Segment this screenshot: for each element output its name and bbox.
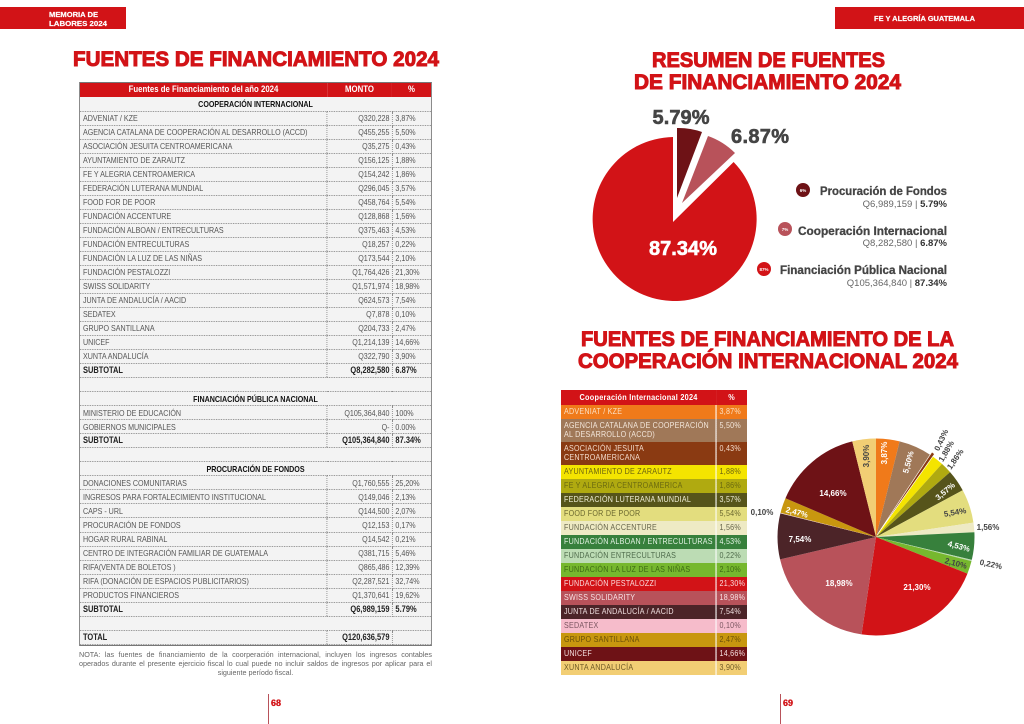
summary legend: cooperacion internacional: 7% <box>782 227 788 232</box>
table: funding sources 2024: PRODUCTOS FINANCIEROS <box>83 590 179 600</box>
table: funding sources 2024: FUNDACIÓN PESTALOZZI <box>83 267 170 277</box>
page number 69 <box>780 694 793 724</box>
table: funding sources 2024: Q154,242 <box>358 169 389 179</box>
table: international cooperation legend: AGENCIA CATALANA DE COOPERACIÓN <box>564 420 709 430</box>
table: funding sources 2024: 25,20% <box>395 478 420 488</box>
summary legend: procuracion de fondos: 6% <box>800 188 806 193</box>
table: funding sources 2024: HOGAR RURAL RABINAL <box>83 534 167 544</box>
table: funding sources 2024: Q144,500 <box>358 506 389 516</box>
table: international cooperation legend: AYUNTAMIENTO DE ZARAUTZ <box>564 466 672 476</box>
table: funding sources 2024: Q1,760,555 <box>352 478 389 488</box>
table: funding sources 2024: 1,86% <box>395 169 416 179</box>
table: funding sources 2024: Q128,868 <box>358 211 389 221</box>
table: funding sources 2024: 87.34% <box>395 435 421 445</box>
table: international cooperation legend: 21,30% <box>720 578 745 588</box>
table: funding sources 2024: Fuentes de Financiamiento del año 2024 <box>129 84 278 94</box>
table: international cooperation legend: 3,57% <box>720 494 741 504</box>
table: international cooperation legend <box>561 390 747 675</box>
table: international cooperation legend: CENTROAMERICANA <box>564 452 640 462</box>
table: funding sources 2024: Q12,153 <box>362 520 389 530</box>
table: funding sources 2024: FINANCIACIÓN PÚBLICA NACIONAL <box>193 394 318 404</box>
table: funding sources 2024: Q120,636,579 <box>342 632 389 642</box>
summary legend: financiacion publica nacional <box>757 262 948 289</box>
table: funding sources 2024: Q156,125 <box>358 155 389 165</box>
summary pie chart: 6.87% <box>731 126 789 148</box>
table: funding sources 2024: PROCURACIÓN DE FONDOS <box>206 464 305 474</box>
table: funding sources 2024: RIFA(VENTA DE BOLETOS ) <box>83 562 176 572</box>
cooperation pie chart: 18,98% <box>825 579 853 588</box>
summary legend: financiacion publica nacional: Q105,364,840 | 87.34% <box>847 278 948 289</box>
table: funding sources 2024 <box>80 83 431 645</box>
title: fuentes de financiamiento: FUENTES DE FINANCIAMIENTO 2024 <box>73 48 439 71</box>
table: funding sources 2024: 4,53% <box>395 225 416 235</box>
table: international cooperation legend: SEDATEX <box>564 620 598 630</box>
table: funding sources 2024: RIFA (DONACIÓN DE ESPACIOS PUBLICITARIOS) <box>83 576 249 586</box>
page number 68: 68 <box>271 698 281 708</box>
table: international cooperation legend: 18,98% <box>720 592 745 602</box>
table: funding sources 2024: FUNDACIÓN ALBOAN / ENTRECULTURAS <box>83 225 224 235</box>
table: international cooperation legend: 14,66% <box>720 648 745 658</box>
table: funding sources 2024: TOTAL <box>83 632 107 642</box>
table: funding sources 2024: 5.79% <box>395 604 417 614</box>
table: funding sources 2024: MONTO <box>345 84 374 94</box>
table: funding sources 2024: Q375,463 <box>358 225 389 235</box>
table: international cooperation legend: 3,87% <box>720 406 741 416</box>
table: funding sources 2024: 2,47% <box>395 323 416 333</box>
table: funding sources 2024: SUBTOTAL <box>83 365 123 375</box>
cooperation pie chart: 3,90% <box>862 445 871 467</box>
table: international cooperation legend: 7,54% <box>720 606 741 616</box>
title: resumen de fuentes: RESUMEN DE FUENTES <box>652 49 885 72</box>
table: funding sources 2024: 0,22% <box>395 239 416 249</box>
table: funding sources 2024: 5,54% <box>395 197 416 207</box>
cooperation pie chart: 1,56% <box>977 523 999 532</box>
table: international cooperation legend: AL DESARROLLO (ACCD) <box>564 429 655 439</box>
table: funding sources 2024: Q320,228 <box>358 113 389 123</box>
summary legend: procuracion de fondos <box>796 183 948 210</box>
table: funding sources 2024: AYUNTAMIENTO DE ZARAUTZ <box>83 155 185 165</box>
table: international cooperation legend: 1,86% <box>720 480 741 490</box>
table: funding sources 2024: Q8,282,580 <box>350 365 389 375</box>
table: international cooperation legend: SWISS SOLIDARITY <box>564 592 635 602</box>
summary legend: financiacion publica nacional: Financiación Pública Nacional <box>780 263 947 277</box>
table: international cooperation legend: ASOCIACIÓN JESUITA <box>564 443 644 453</box>
table: funding sources 2024: CAPS - URL <box>83 506 123 516</box>
table: funding sources 2024: 21,30% <box>395 267 420 277</box>
footnote: operados durante el presente ejercicio fiscal lo cual puede no incluir saldos de ingresos por aplicar para el <box>79 659 432 668</box>
table: funding sources 2024: 100% <box>395 408 414 418</box>
table: funding sources 2024: 0,10% <box>395 309 416 319</box>
table: funding sources 2024: JUNTA DE ANDALUCÍA / AACID <box>83 295 186 305</box>
table: funding sources 2024: 0,21% <box>395 534 416 544</box>
table: international cooperation legend: 5,54% <box>720 508 741 518</box>
table: funding sources 2024: FE Y ALEGRIA CENTROAMERICA <box>83 169 195 179</box>
table: funding sources 2024: INGRESOS PARA FORTALECIMIENTO INSTITUCIONAL <box>83 492 266 502</box>
footnote: siguiente período fiscal. <box>218 668 293 677</box>
header tab right <box>835 7 1024 29</box>
table: funding sources 2024: FUNDACIÓN LA LUZ DE LAS NIÑAS <box>83 253 202 263</box>
table: funding sources 2024: Q149,046 <box>358 492 389 502</box>
summary legend: financiacion publica nacional: 87% <box>759 267 769 272</box>
table: international cooperation legend: XUNTA ANDALUCÍA <box>564 662 633 672</box>
table: funding sources 2024: 32,74% <box>395 576 420 586</box>
summary legend: cooperacion internacional: Cooperación Internacional <box>798 224 947 238</box>
table: funding sources 2024: Q204,733 <box>358 323 389 333</box>
table: funding sources 2024: SEDATEX <box>83 309 116 319</box>
cooperation pie chart: 4,53% <box>947 539 971 554</box>
table: funding sources 2024: 3,87% <box>395 113 416 123</box>
table: funding sources 2024: SUBTOTAL <box>83 604 123 614</box>
table: international cooperation legend: 4,53% <box>720 536 741 546</box>
table: international cooperation legend: JUNTA DE ANDALUCÍA / AACID <box>564 606 674 616</box>
table: international cooperation legend: 2,47% <box>720 634 741 644</box>
cooperation pie chart: 1,86% <box>945 447 966 471</box>
header tab left <box>0 7 126 29</box>
summary legend: procuracion de fondos: Q6,989,159 | 5.79% <box>863 199 948 210</box>
table: funding sources 2024: Q458,764 <box>358 197 389 207</box>
table: funding sources 2024: 0,43% <box>395 141 416 151</box>
table: funding sources 2024: Q296,045 <box>358 183 389 193</box>
footnote: NOTA: las fuentes de financiamiento de la coorperación internacional, incluyen los ingresos contables <box>79 650 432 659</box>
table: funding sources 2024: Q6,989,159 <box>350 604 389 614</box>
table: funding sources 2024: XUNTA ANDALUCÍA <box>83 351 149 361</box>
table: funding sources 2024: Q35,275 <box>362 141 389 151</box>
summary pie chart <box>593 107 789 301</box>
cooperation pie chart: 14,66% <box>819 489 847 498</box>
table: funding sources 2024: Q624,573 <box>358 295 389 305</box>
table: funding sources 2024: 1,88% <box>395 155 416 165</box>
table: international cooperation legend: Cooperación Internacional 2024 <box>580 392 698 402</box>
table: funding sources 2024: Q322,790 <box>358 351 389 361</box>
table: funding sources 2024: 2,07% <box>395 506 416 516</box>
table: funding sources 2024: CENTRO DE INTEGRACIÓN FAMILIAR DE GUATEMALA <box>83 548 268 558</box>
table: funding sources 2024: 19,62% <box>395 590 420 600</box>
table: funding sources 2024: Q1,370,641 <box>352 590 389 600</box>
cooperation pie chart <box>751 428 1003 592</box>
cooperation pie chart: 3,87% <box>880 442 889 464</box>
table: funding sources 2024: SWISS SOLIDARITY <box>83 281 150 291</box>
table: funding sources 2024: 18,98% <box>395 281 420 291</box>
table: funding sources 2024: Q2,287,521 <box>352 576 389 586</box>
title: cooperacion internacional: COOPERACIÓN INTERNACIONAL 2024 <box>578 349 958 373</box>
table: funding sources 2024: 6.87% <box>395 365 417 375</box>
table: funding sources 2024: 7,54% <box>395 295 416 305</box>
table: funding sources 2024: AGENCIA CATALANA DE COOPERACIÓN AL DESARROLLO (ACCD) <box>83 127 308 137</box>
footnote <box>79 650 432 677</box>
table: funding sources 2024: GOBIERNOS MUNICIPALES <box>83 422 176 432</box>
table: international cooperation legend: 2,10% <box>720 564 741 574</box>
cooperation pie chart: 0,43% <box>933 428 950 452</box>
table: funding sources 2024: 14,66% <box>395 337 420 347</box>
title: cooperacion internacional <box>578 328 958 373</box>
table: funding sources 2024: Q865,486 <box>358 562 389 572</box>
table: funding sources 2024: Q1,214,139 <box>352 337 389 347</box>
table: funding sources 2024: FUNDACIÓN ENTRECULTURAS <box>83 239 189 249</box>
summary pie chart: 5.79% <box>652 107 710 129</box>
table: international cooperation legend: FUNDACIÓN ENTRECULTURAS <box>564 550 676 560</box>
table: funding sources 2024: 12,39% <box>395 562 420 572</box>
title: resumen de fuentes: DE FINANCIAMIENTO 2024 <box>634 71 901 94</box>
table: funding sources 2024: ADVENIAT / KZE <box>83 113 138 123</box>
title: resumen de fuentes <box>634 49 901 94</box>
table: funding sources 2024: Q105,364,840 <box>342 435 389 445</box>
table: international cooperation legend: 5,50% <box>720 420 741 430</box>
table: funding sources 2024: GRUPO SANTILLANA <box>83 323 155 333</box>
cooperation pie chart: 2,10% <box>944 556 968 571</box>
table: funding sources 2024: 5,50% <box>395 127 416 137</box>
table: funding sources 2024: FEDERACIÓN LUTERANA MUNDIAL <box>83 183 203 193</box>
table: funding sources 2024: 5,46% <box>395 548 416 558</box>
cooperation pie chart: 0,22% <box>979 558 1003 571</box>
table: funding sources 2024: 2,10% <box>395 253 416 263</box>
table: funding sources 2024: Q- <box>382 422 389 432</box>
table: funding sources 2024: 2,13% <box>395 492 416 502</box>
table: international cooperation legend: FUNDACIÓN ALBOAN / ENTRECULTURAS <box>564 536 713 546</box>
table: funding sources 2024: 1,56% <box>395 211 416 221</box>
table: funding sources 2024: Q105,364,840 <box>344 408 389 418</box>
table: funding sources 2024: 3,90% <box>395 351 416 361</box>
summary pie chart: 87.34% <box>649 238 717 260</box>
table: funding sources 2024: 3,57% <box>395 183 416 193</box>
table: funding sources 2024: Q455,255 <box>358 127 389 137</box>
cooperation pie chart: 21,30% <box>903 583 931 592</box>
table: international cooperation legend: FOOD FOR DE POOR <box>564 508 640 518</box>
table: international cooperation legend: FE Y ALEGRIA CENTROAMERICA <box>564 480 683 490</box>
table: funding sources 2024: 0,17% <box>395 520 416 530</box>
table: funding sources 2024: Q18,257 <box>362 239 389 249</box>
table: funding sources 2024: PROCURACIÓN DE FONDOS <box>83 520 181 530</box>
table: funding sources 2024: Q381,715 <box>358 548 389 558</box>
table: international cooperation legend: 0,10% <box>720 620 741 630</box>
table: international cooperation legend: % <box>728 392 735 402</box>
header tab left: LABORES 2024 <box>49 19 108 28</box>
table: international cooperation legend: ADVENIAT / KZE <box>564 406 622 416</box>
cooperation pie chart: 2,47% <box>785 505 809 520</box>
table: funding sources 2024: Q7,878 <box>366 309 389 319</box>
page number 68 <box>268 694 281 724</box>
cooperation pie chart: 5,50% <box>901 450 916 474</box>
header tab left: MEMORIA DE <box>49 10 98 19</box>
cooperation pie chart: 3,57% <box>934 481 957 502</box>
summary legend: procuracion de fondos: Procuración de Fondos <box>820 184 947 198</box>
table: funding sources 2024: Q173,544 <box>358 253 389 263</box>
summary legend: cooperacion internacional <box>778 222 948 249</box>
table: funding sources 2024: 0.00% <box>395 422 416 432</box>
table: international cooperation legend: 1,88% <box>720 466 741 476</box>
table: funding sources 2024: MINISTERIO DE EDUCACIÓN <box>83 408 181 418</box>
table: international cooperation legend: UNICEF <box>564 648 592 658</box>
table: funding sources 2024: % <box>408 84 415 94</box>
table: international cooperation legend: GRUPO SANTILLANA <box>564 634 640 644</box>
table: international cooperation legend: 0,22% <box>720 550 741 560</box>
table: international cooperation legend: FUNDACIÓN LA LUZ DE LAS NIÑAS <box>564 564 690 574</box>
table: funding sources 2024: FUNDACIÓN ACCENTURE <box>83 211 171 221</box>
cooperation pie chart: 1,88% <box>937 439 956 463</box>
table: international cooperation legend: FEDERACIÓN LUTERANA MUNDIAL <box>564 494 691 504</box>
table: funding sources 2024: DONACIONES COMUNITARIAS <box>83 478 187 488</box>
table: funding sources 2024: FOOD FOR DE POOR <box>83 197 155 207</box>
page number 69: 69 <box>783 698 793 708</box>
table: international cooperation legend: FUNDACIÓN ACCENTURE <box>564 522 657 532</box>
summary legend: cooperacion internacional: Q8,282,580 | 6.87% <box>863 238 948 249</box>
table: international cooperation legend: 1,56% <box>720 522 741 532</box>
cooperation pie chart: 0,10% <box>751 508 773 517</box>
table: international cooperation legend: 0,43% <box>720 442 741 452</box>
table: international cooperation legend: FUNDACIÓN PESTALOZZI <box>564 578 656 588</box>
cooperation pie chart: 7,54% <box>789 535 811 544</box>
title: cooperacion internacional: FUENTES DE FINANCIAMIENTO DE LA <box>581 328 954 351</box>
table: funding sources 2024: Q14,542 <box>362 534 389 544</box>
table: funding sources 2024: COOPERACIÓN INTERNACIONAL <box>198 99 313 109</box>
table: funding sources 2024: Q1,764,426 <box>352 267 389 277</box>
header tab right: FE Y ALEGRÍA GUATEMALA <box>874 14 976 23</box>
table: funding sources 2024: Q1,571,974 <box>352 281 389 291</box>
table: funding sources 2024: SUBTOTAL <box>83 435 123 445</box>
table: funding sources 2024: UNICEF <box>83 337 109 347</box>
table: international cooperation legend: 3,90% <box>720 662 741 672</box>
cooperation pie chart: 5,54% <box>943 506 967 519</box>
table: funding sources 2024: ASOCIACIÓN JESUITA CENTROAMERICANA <box>83 141 232 151</box>
